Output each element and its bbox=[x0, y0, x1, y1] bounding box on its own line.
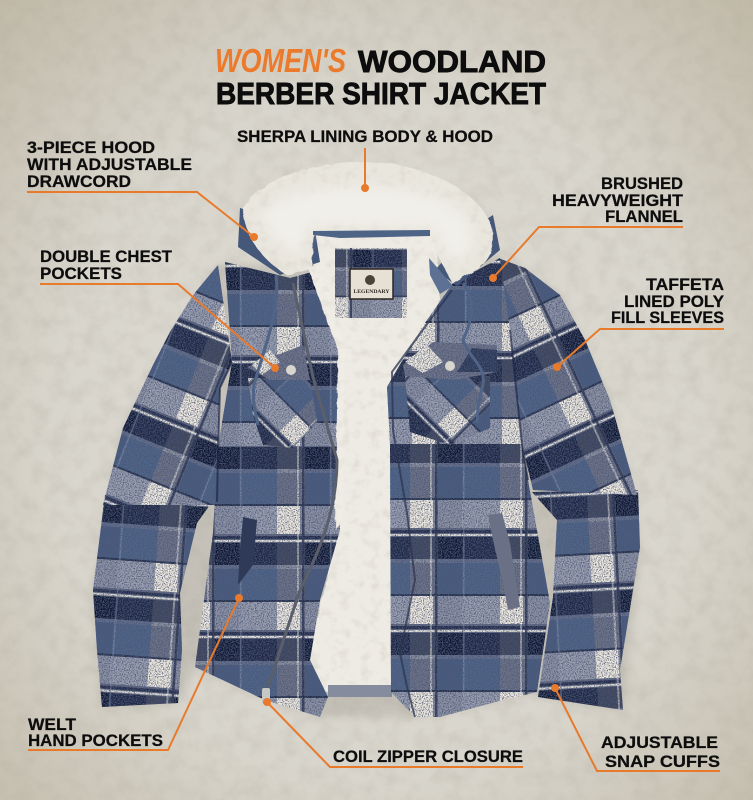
left chest pocket bbox=[247, 345, 317, 448]
title: BERBER SHIRT JACKET bbox=[216, 76, 546, 111]
callout: taffeta sleeves bbox=[553, 275, 725, 371]
callout: adjustable snap cuffs: ADJUSTABLE bbox=[601, 733, 718, 752]
brand label bbox=[350, 269, 393, 299]
title: WOMEN'S bbox=[215, 42, 346, 79]
neck tape bbox=[313, 230, 430, 238]
callout: brushed flannel: HEAVYWEIGHT bbox=[552, 191, 684, 210]
callout: adjustable snap cuffs bbox=[551, 684, 720, 771]
left drawcord bbox=[253, 275, 277, 425]
sleeve seams bbox=[217, 330, 528, 502]
left pocket flap bbox=[247, 345, 310, 380]
right front body upper bbox=[387, 258, 522, 445]
back yoke patch bbox=[335, 248, 407, 318]
callout: sherpa lining: SHERPA LINING BODY & HOOD bbox=[237, 127, 493, 146]
callout: 3-piece hood: WITH ADJUSTABLE bbox=[27, 155, 192, 174]
left upper sleeve bbox=[103, 265, 232, 505]
sherpa back lining bbox=[300, 228, 440, 692]
callout: taffeta sleeves: FILL SLEEVES bbox=[611, 308, 724, 327]
jacket illustration bbox=[93, 162, 640, 717]
callout: welt hand pockets: HAND POCKETS bbox=[28, 731, 163, 750]
hand pocket welts bbox=[238, 513, 520, 610]
right drawcord bbox=[463, 283, 483, 423]
callout: adjustable snap cuffs: SNAP CUFFS bbox=[605, 752, 720, 771]
right pocket flap bbox=[403, 342, 497, 380]
callout: coil zipper closure bbox=[263, 698, 523, 767]
right front body lower bbox=[390, 444, 550, 717]
sherpa hood lining bbox=[243, 162, 493, 284]
zipper pull bbox=[262, 688, 270, 704]
right flap navy bbox=[457, 348, 497, 372]
callout: 3-piece hood: DRAWCORD bbox=[27, 172, 131, 191]
left flap white patch bbox=[252, 350, 280, 375]
callout: double chest pockets: POCKETS bbox=[40, 264, 122, 283]
coil zipper bbox=[267, 283, 337, 690]
callout: 3-piece hood bbox=[27, 138, 258, 241]
callout: welt hand pockets: WELT bbox=[28, 715, 77, 734]
callout: taffeta sleeves: TAFFETA bbox=[646, 275, 724, 294]
title: WOODLAND bbox=[358, 44, 546, 79]
callout: taffeta sleeves: LINED POLY bbox=[624, 292, 725, 311]
callout: 3-piece hood: 3-PIECE HOOD bbox=[27, 138, 155, 157]
jacket shadow bbox=[93, 258, 640, 717]
right chest pocket bbox=[403, 342, 497, 445]
hood outer shell bbox=[238, 208, 500, 286]
left sherpa collar facing bbox=[308, 265, 344, 528]
bright inner hood bbox=[262, 187, 473, 262]
callout: brushed flannel: FLANNEL bbox=[605, 207, 683, 226]
callout: coil zipper closure: COIL ZIPPER CLOSURE bbox=[333, 747, 523, 766]
right sleeve bbox=[498, 258, 640, 710]
callout: sherpa lining bbox=[237, 127, 493, 192]
callout: brushed flannel bbox=[489, 174, 684, 282]
left front body upper bbox=[218, 262, 340, 447]
right upper sleeve bbox=[498, 258, 637, 495]
right zipper edge bbox=[392, 290, 452, 717]
brand label: LEGENDARY bbox=[354, 289, 390, 295]
left sleeve bbox=[93, 265, 232, 707]
callout: brushed flannel: BRUSHED bbox=[601, 174, 683, 193]
callout: double chest pockets bbox=[40, 247, 279, 372]
inner hem strip bbox=[328, 685, 392, 697]
left front body lower bbox=[195, 446, 340, 717]
callout: double chest pockets: DOUBLE CHEST bbox=[40, 247, 173, 266]
callout: welt hand pockets bbox=[28, 594, 243, 750]
right collar trim bbox=[429, 258, 453, 294]
right flap white patch bbox=[405, 345, 443, 373]
pocket snaps bbox=[286, 361, 455, 375]
title bbox=[215, 42, 546, 111]
